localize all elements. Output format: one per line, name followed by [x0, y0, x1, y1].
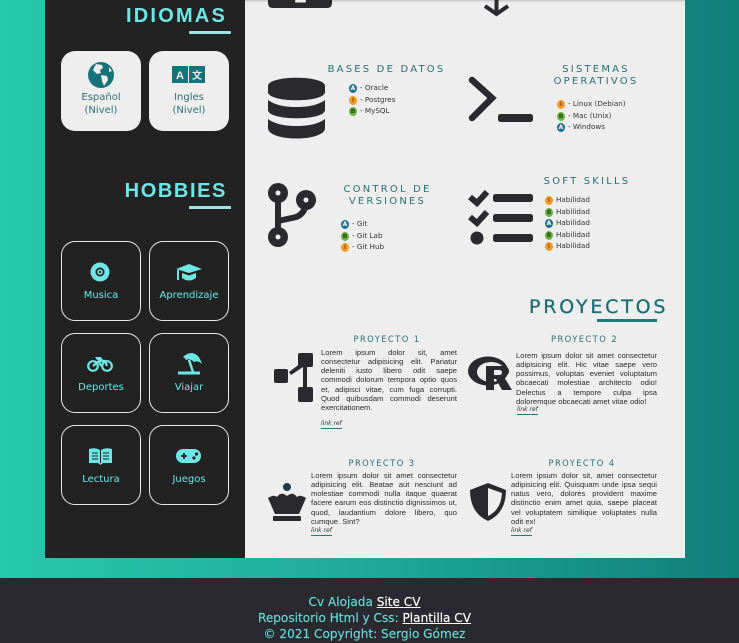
link: link ref — [321, 420, 342, 427]
icon: shield — [470, 483, 506, 521]
card: Español: (Nivel) — [85, 104, 117, 116]
project 1 — [274, 334, 457, 429]
skill list: soft skills: Habilidad — [556, 218, 590, 226]
paragraph: odit ex! — [511, 517, 535, 526]
section title: control de versiones — [343, 184, 432, 207]
project 4 — [470, 458, 657, 536]
skill list: control de versiones: - Git — [352, 218, 367, 228]
link: link ref — [511, 526, 532, 534]
paragraph: Lorem ipsum dolor sit, amet consectetur — [511, 471, 657, 480]
skill list: sistemas operativos: - Windows — [568, 122, 605, 130]
skill list: bases de datos: - Postgres — [360, 94, 395, 104]
card: Viajar: Viajar — [175, 382, 203, 392]
skill list: control de versiones: A — [343, 221, 347, 228]
card: Ingles — [149, 51, 229, 131]
paragraph — [511, 471, 657, 526]
card: Ingles: Ingles — [174, 92, 204, 103]
icon: top fragment of previous section — [268, 0, 332, 8]
section title: control de versiones: VERSIONES — [349, 196, 426, 207]
icon: translate: A — [176, 70, 184, 82]
paragraph — [311, 471, 457, 526]
project 2 — [468, 334, 657, 415]
card: Aprendizaje: Aprendizaje — [159, 290, 218, 300]
skill list: soft skills: Habilidad — [556, 206, 590, 216]
paragraph: natus vero, dolores provident maxime — [511, 489, 657, 498]
skill list: soft skills: I — [548, 243, 550, 250]
skill list: bases de datos: - MySQL — [360, 106, 390, 114]
skill list: control de versiones — [341, 218, 384, 252]
skill list: control de versiones: B — [343, 233, 347, 240]
icon: R logo — [468, 356, 512, 390]
skill list: bases de datos: - Oracle — [360, 82, 388, 92]
paragraph: Lorem ipsum dolor sit amet consectetur — [311, 471, 457, 480]
icon: nodes — [274, 353, 313, 402]
card: Deportes — [61, 333, 141, 413]
icon: open book — [89, 448, 112, 465]
paragraph: consectetur adipisicing elit. Pariatur — [321, 357, 457, 366]
heading underline: idiomas — [189, 31, 231, 34]
card: Aprendizaje — [149, 241, 229, 321]
paragraph: distinctio enim amet quia, saepe placeat — [511, 498, 657, 507]
paragraph: molestiae commodi nulla itaque quaerat — [311, 489, 457, 498]
heading: idiomas: IDIOMAS — [126, 5, 227, 27]
skill list: soft skills: Habilidad — [556, 194, 590, 204]
icon: graduation cap — [176, 264, 202, 280]
project title: PROYECTO 3 — [349, 458, 415, 468]
icon: beach umbrella — [178, 353, 202, 374]
skill list: soft skills: I — [548, 197, 550, 204]
page background panel: sidebar — [45, 0, 245, 558]
skill list: soft skills — [545, 194, 590, 251]
footer line: copyright: © 2021 Copyright: Sergio Gómez — [263, 627, 466, 641]
skill list: control de versiones: I — [344, 244, 346, 251]
card: Musica: Musica — [84, 290, 118, 300]
paragraph: et, adipisci vitae, cum fuga corrupti. — [321, 385, 457, 394]
paragraph: adipisicing elit. Hic vitae saepe vero — [516, 360, 657, 369]
paragraph: vel voluptatem similique voluptates nulla — [511, 508, 657, 517]
skill list: soft skills: B — [547, 232, 551, 239]
skill list: soft skills: Habilidad — [556, 230, 590, 238]
paragraph: obcaecati molestiae architecto odio! — [516, 378, 657, 387]
paragraph: Delectus a tempore culpa ipsa — [516, 388, 657, 397]
project title: PROYECTO 2 — [551, 334, 618, 344]
icon: translate — [172, 66, 205, 83]
link: link ref — [311, 526, 332, 534]
project title: PROYECTO 4 — [549, 458, 615, 468]
icon: chess queen — [268, 483, 306, 521]
section title: sistemas operativos: SISTEMAS — [562, 64, 630, 75]
skill list: soft skills: Habilidad — [556, 240, 590, 250]
paragraph: commodi dolorum tempora optio quos — [321, 375, 457, 384]
heading underline: proyectos — [597, 319, 657, 322]
card: Español: Español — [81, 92, 121, 103]
project 3 — [268, 458, 457, 536]
paragraph: adipisicing elit. Beatae aut nesciunt ad — [311, 480, 457, 489]
heading: hobbies: HOBBIES — [125, 180, 227, 202]
section title: bases de datos: BASES DE DATOS — [328, 64, 445, 75]
icon: checklist — [468, 190, 533, 244]
section title: soft skills: SOFT SKILLS — [544, 176, 630, 187]
footer line: repository: Repositorio Html y Css: Plantilla CV — [258, 611, 471, 625]
heading: proyectos: PROYECTOS — [529, 296, 668, 318]
skill list: bases de datos: I — [352, 97, 354, 104]
heading underline: hobbies — [189, 206, 231, 209]
paragraph: adipisicing elit. Quisquam unde ipsa sequi — [511, 480, 657, 489]
card: Viajar — [149, 333, 229, 413]
skill list: control de versiones: - Git Lab — [352, 230, 383, 240]
paragraph: quod, laudantium dolore libero, quo — [311, 508, 457, 517]
card: Lectura — [61, 425, 141, 505]
card: Español — [61, 51, 141, 131]
section title: sistemas operativos: OPERATIVOS — [554, 76, 638, 87]
icon: translate: 文 — [192, 67, 202, 82]
skill list: sistemas operativos: - Mac (Unix) — [568, 110, 611, 120]
skill list: bases de datos: A — [351, 85, 355, 92]
icon: terminal — [468, 76, 533, 122]
icon: top fragment of arrow — [484, 0, 510, 16]
skill list: control de versiones: - Git Hub — [352, 242, 384, 250]
paragraph: cumque. Sint? — [311, 517, 360, 526]
card: Lectura: Lectura — [82, 474, 120, 484]
skill list: sistemas operativos: A — [559, 124, 563, 131]
page background panel: main content — [245, 0, 685, 558]
paragraph — [321, 348, 457, 412]
paragraph: facere earum eos distinctio dignissimos ut, — [311, 498, 457, 507]
skill list: bases de datos — [349, 82, 396, 116]
skill list: sistemas operativos: - Linux (Debian) — [568, 98, 626, 108]
icon: git branch — [268, 183, 316, 247]
card: Musica — [61, 241, 141, 321]
paragraph: possimus, voluptas eveniet voluptatum — [516, 369, 657, 378]
icon: disc — [90, 262, 110, 282]
icon: gamepad — [176, 449, 201, 463]
skill list: bases de datos: B — [351, 108, 355, 115]
skill list: soft skills: B — [547, 209, 551, 216]
paragraph: Lorem ipsum dolor sit amet consectetur — [516, 351, 657, 360]
section title: sistemas operativos — [554, 64, 638, 87]
skill list: sistemas operativos — [557, 98, 626, 132]
project title: PROYECTO 1 — [354, 334, 420, 344]
skill list: sistemas operativos: I — [560, 101, 562, 108]
card: Deportes: Deportes — [78, 382, 124, 392]
paragraph — [516, 351, 657, 406]
card: Juegos — [149, 425, 229, 505]
link: link ref — [517, 406, 538, 413]
icon: bicycle — [87, 357, 113, 372]
section title: control de versiones: CONTROL DE — [343, 184, 432, 195]
paragraph: Quod quibusdam commodi deserunt — [321, 394, 457, 403]
card: Ingles: (Nivel) — [173, 104, 205, 116]
footer — [0, 578, 739, 643]
icon: globe — [88, 62, 114, 88]
paragraph: deleniti iusto libero odit saepe — [321, 366, 457, 375]
skill list: sistemas operativos: B — [559, 113, 563, 120]
card: Juegos: Juegos — [172, 474, 206, 484]
footer line: site: Cv Alojada Site CV — [309, 595, 420, 609]
icon: database — [268, 78, 325, 138]
paragraph: exercitationem. — [321, 403, 372, 412]
paragraph: Lorem ipsum dolor sit, amet — [321, 348, 457, 357]
skill list: soft skills: A — [547, 220, 551, 227]
paragraph: doloremque obcaecati amet vitae odio! — [516, 397, 646, 406]
